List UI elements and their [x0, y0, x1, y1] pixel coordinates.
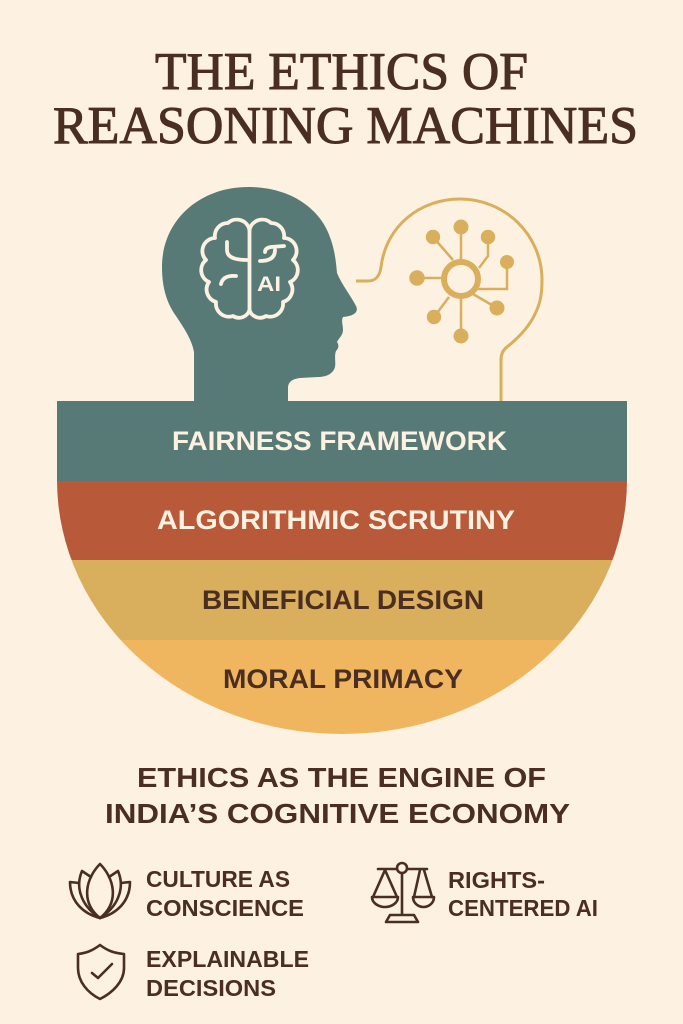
- icon: outlined head with neural network: [356, 199, 542, 402]
- band label: beneficial design: BENEFICIAL DESIGN: [202, 585, 484, 615]
- neural network lines: [417, 227, 507, 336]
- text: explainable decisions: EXPLAINABLE: [146, 946, 309, 972]
- band label: moral primacy: MORAL PRIMACY: [223, 664, 463, 694]
- icon: scales of justice: [372, 863, 434, 922]
- icon: brain outline: AI: [257, 273, 281, 296]
- title: REASONING MACHINES: [53, 97, 638, 155]
- title: [53, 43, 638, 155]
- subheading: [105, 762, 570, 829]
- text: explainable decisions: DECISIONS: [146, 975, 276, 1001]
- icon: shield with check: [78, 945, 124, 999]
- layered bowl diagram: [57, 401, 627, 735]
- text: rights-centered AI: RIGHTS-: [448, 867, 545, 893]
- neural network nodes: [409, 220, 514, 344]
- text: culture as conscience: CONSCIENCE: [146, 895, 304, 921]
- band label: algorithmic scrutiny: ALGORITHMIC SCRUTINY: [157, 505, 515, 535]
- text: rights-centered AI: CENTERED AI: [448, 895, 598, 921]
- subheading: ETHICS AS THE ENGINE OF: [137, 762, 546, 793]
- icon: brain outline: [201, 220, 298, 318]
- title: THE ETHICS OF: [155, 43, 528, 101]
- icon: teal human head with AI brain: [162, 187, 357, 402]
- text: culture as conscience: CULTURE AS: [146, 866, 290, 892]
- subheading: INDIA’S COGNITIVE ECONOMY: [105, 798, 570, 829]
- text: culture as conscience: [146, 866, 304, 921]
- text: rights-centered AI: [448, 867, 598, 921]
- text: explainable decisions: [146, 946, 309, 1001]
- icon: lotus: [70, 864, 130, 918]
- band label: fairness framework: FAIRNESS FRAMEWORK: [172, 426, 508, 456]
